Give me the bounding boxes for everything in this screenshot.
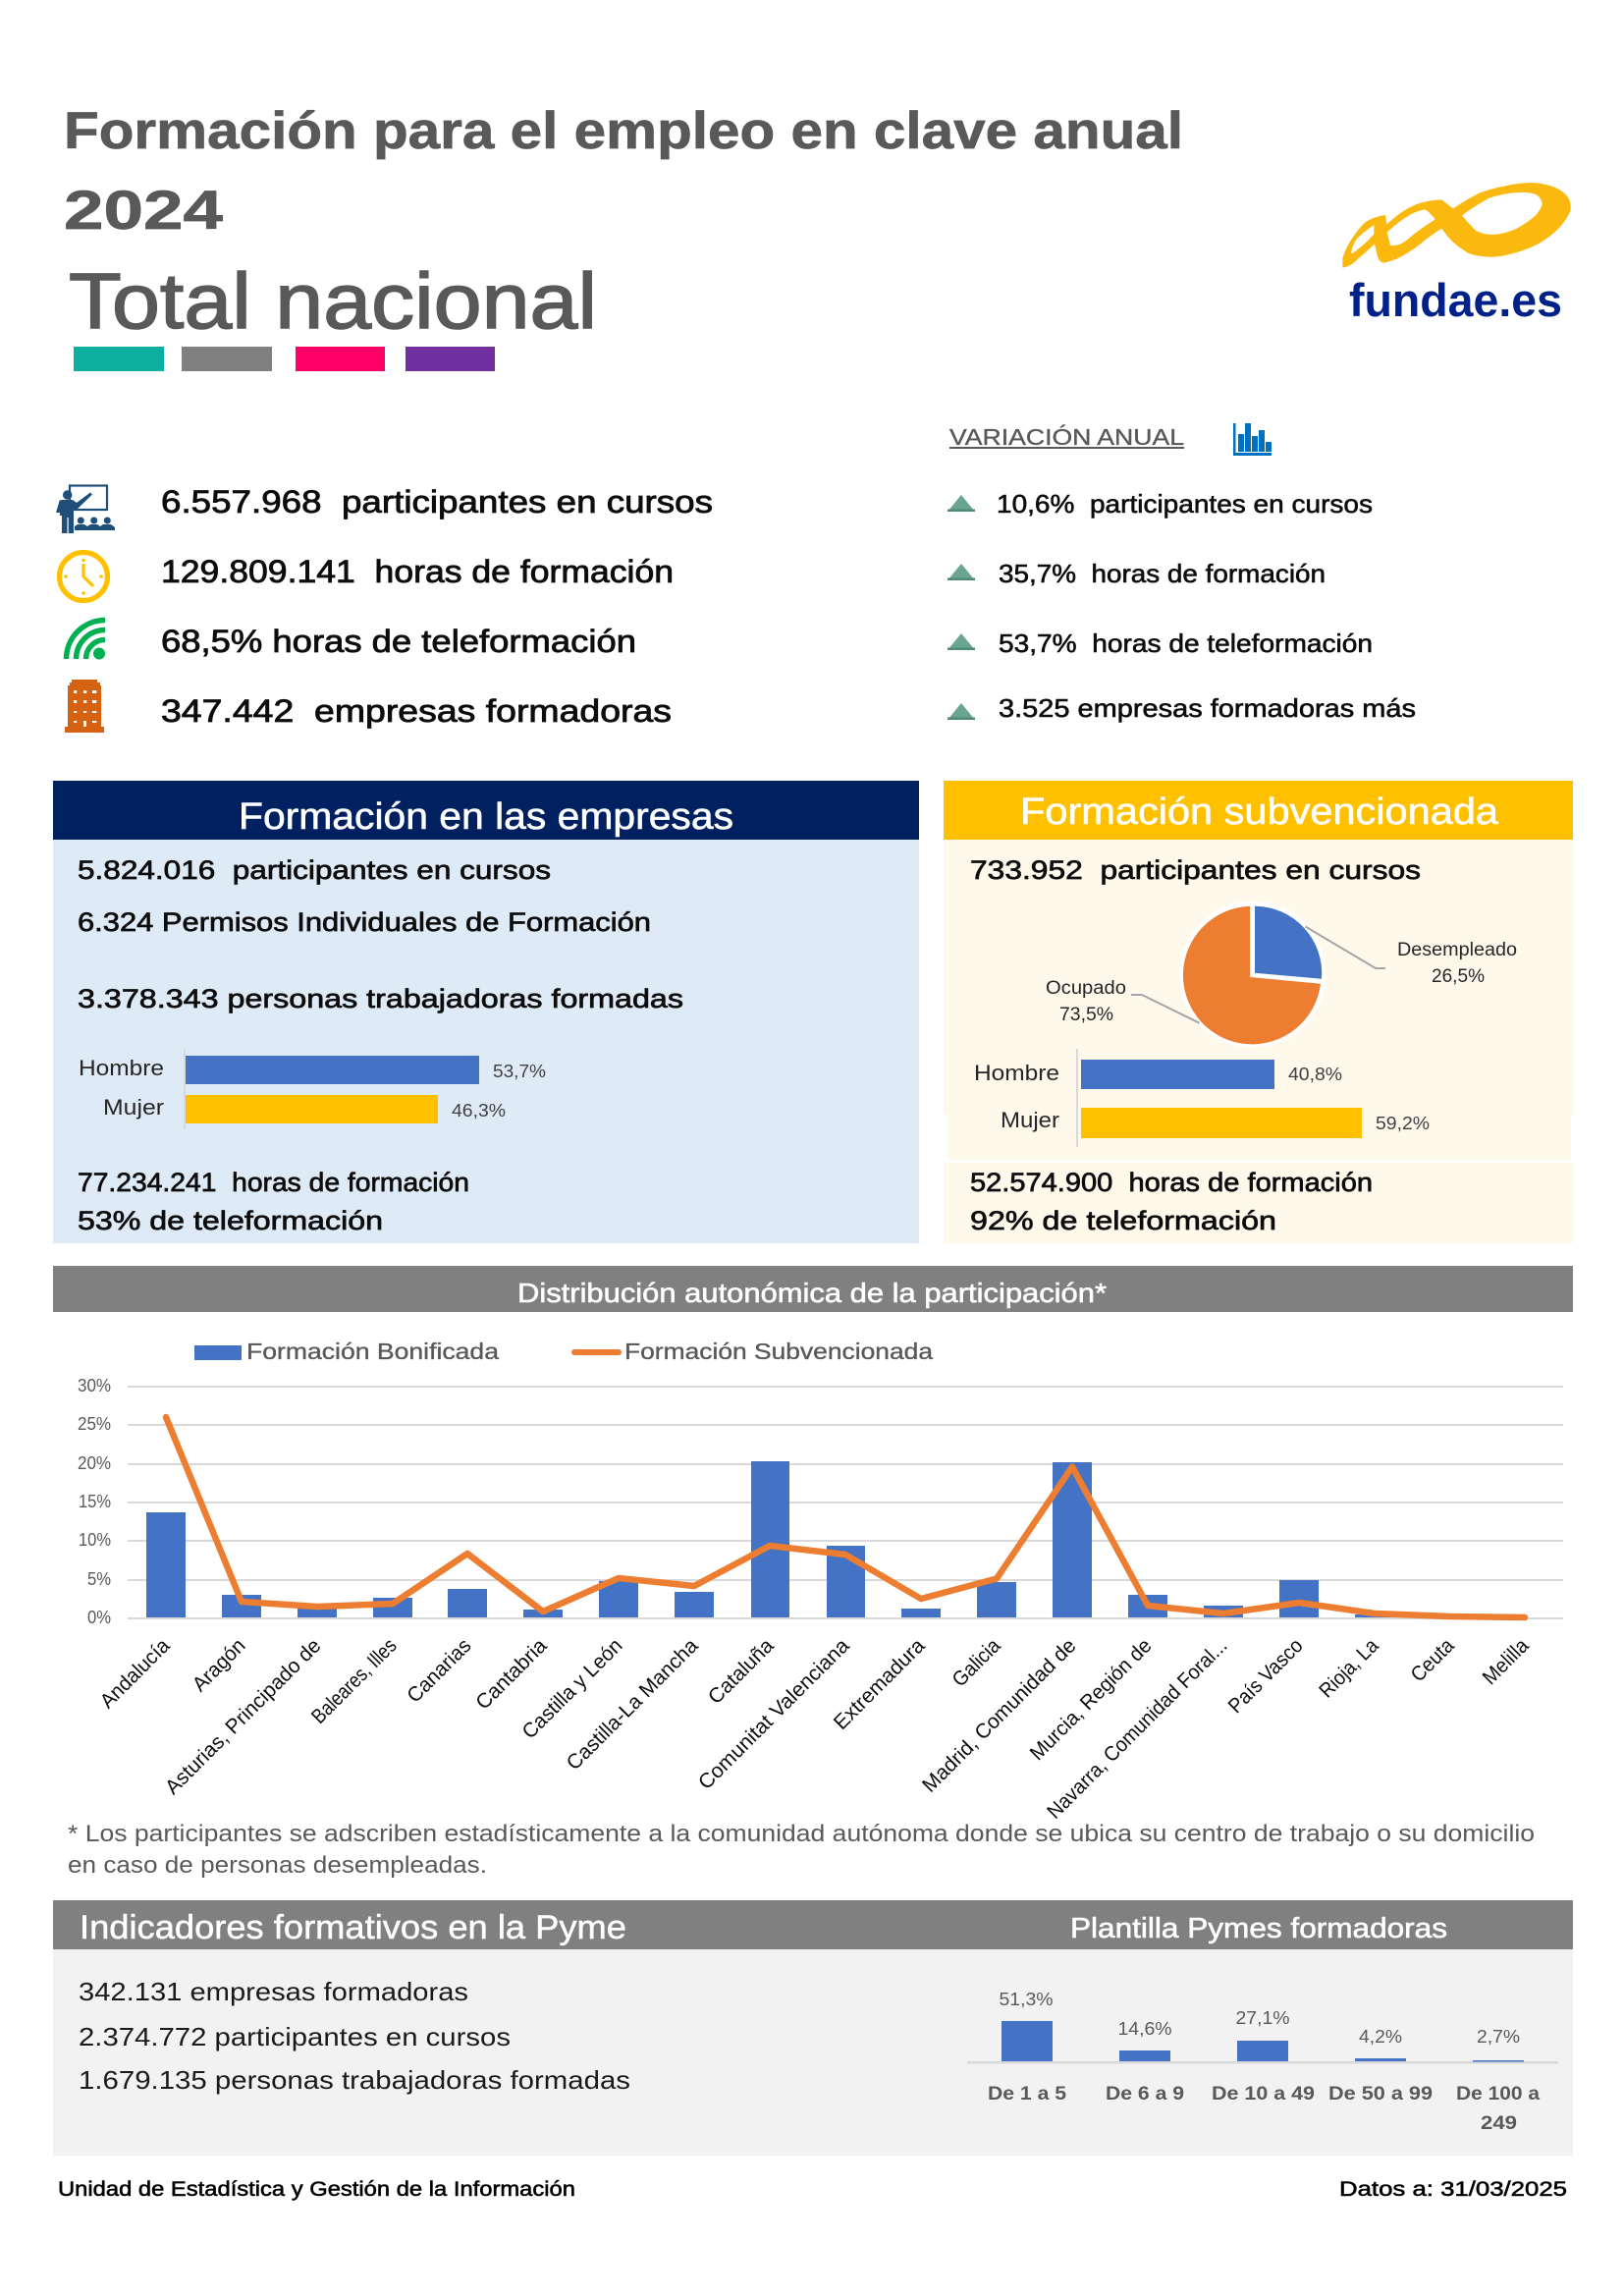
subtitle: Total nacional: [69, 257, 597, 345]
category labels: Murcia, Región de: [1026, 1634, 1157, 1765]
category labels: Aragón: [189, 1634, 250, 1696]
bar chart: plantilla pymes: De 10 a 49: [1212, 2084, 1315, 2105]
y axis labels: 20%: [78, 1453, 111, 1473]
text: horas: 52.574.900 horas de formación: [970, 1168, 1373, 1197]
icon: wifi: [67, 621, 105, 660]
category labels: Galicia: [948, 1634, 1005, 1691]
icon: clock: [59, 552, 108, 601]
text: teleformación: 53% de teleformación: [78, 1206, 383, 1235]
panel: formación subvencionada: [944, 781, 1573, 1243]
title block: [64, 102, 1183, 345]
text: permisos: 6.324 Permisos Individuales de Formación: [78, 907, 651, 937]
logo: fundae.es: [1342, 183, 1571, 326]
category labels: [96, 1634, 1534, 1824]
panel heading: Formación en las empresas: [239, 796, 733, 838]
icon: building: [65, 680, 104, 733]
bar chart: sexo subvencionada: Mujer: [1001, 1108, 1059, 1132]
stat: empresas: 347.442 empresas formadoras: [161, 693, 672, 729]
text: participantes: 733.952 participantes en cursos: [970, 855, 1421, 885]
panel heading: [53, 781, 919, 840]
y axis labels: [78, 1376, 111, 1627]
bar chart: plantilla pymes: De 100 a: [1456, 2084, 1540, 2105]
bar chart: plantilla pymes: [967, 1990, 1558, 2134]
category labels: Rioja, La: [1315, 1634, 1383, 1703]
y axis labels: 25%: [78, 1414, 111, 1434]
legend: Formación Subvencionada: [624, 1339, 933, 1364]
bar chart: plantilla pymes: 27,1%: [1235, 2008, 1290, 2028]
title line 1: Formación para el empleo en clave anual: [64, 102, 1183, 160]
panel: formación en las empresas: [53, 781, 919, 1243]
bar chart: sexo subvencionada: 40,8%: [1288, 1065, 1342, 1084]
panel heading: Formación subvencionada: [1020, 792, 1499, 833]
footer: [58, 2178, 1567, 2201]
stat: participantes: 6.557.968 participantes en cursos: [161, 484, 713, 519]
pie chart: 73,5%: [1059, 1005, 1113, 1025]
triangle up 4: [947, 703, 975, 720]
annual variation list: [947, 489, 1416, 723]
category labels: Canarias: [403, 1634, 476, 1708]
line: formación subvencionada: [166, 1417, 1525, 1617]
category labels: Comunitat Valenciana: [694, 1634, 854, 1794]
pie chart: 26,5%: [1432, 966, 1485, 987]
title year: 2024: [64, 179, 223, 241]
key figures: [56, 484, 713, 733]
pie chart: Desempleado: [1397, 940, 1517, 960]
text: teleformación: 92% de teleformación: [970, 1206, 1276, 1235]
bar chart: sexo empresas: Hombre: [79, 1056, 164, 1080]
text: indicadores: 1.679.135 personas trabajadoras formadas: [79, 2065, 630, 2095]
bar chart: plantilla pymes: De 50 a 99: [1328, 2084, 1433, 2105]
y axis labels: 0%: [87, 1608, 111, 1627]
bar chart: sexo empresas: 46,3%: [452, 1101, 506, 1121]
y axis labels: 15%: [79, 1492, 111, 1511]
text: personas: 3.378.343 personas trabajadoras formadas: [78, 984, 683, 1013]
icon: bar chart: [1233, 423, 1272, 456]
bar chart: plantilla pymes: 2,7%: [1477, 2027, 1520, 2047]
triangle up 2: [947, 564, 975, 580]
logo wordmark: fundae.es: [1349, 274, 1562, 326]
legend: [194, 1339, 933, 1364]
category labels: Asturias, Principado de: [161, 1634, 326, 1799]
variación anual heading: VARIACIÓN ANUAL: [949, 424, 1184, 450]
text: indicadores: [79, 1977, 630, 2095]
variation 4: 3.525 empresas formadoras más: [999, 693, 1416, 723]
panel heading: [944, 781, 1573, 840]
triangle up 3: [947, 633, 975, 650]
panel header: [53, 1900, 1573, 1949]
bar chart: sexo empresas: 53,7%: [493, 1062, 546, 1081]
y axis labels: 30%: [78, 1376, 111, 1395]
bar chart: sexo subvencionada: 59,2%: [1376, 1114, 1430, 1133]
bar chart: sexo subvencionada: [974, 1049, 1430, 1147]
bar chart: sexo empresas: Mujer: [103, 1095, 164, 1120]
y axis labels: 5%: [87, 1569, 111, 1589]
footer: Unidad de Estadística y Gestión de la Información: [58, 2178, 575, 2201]
bar chart: plantilla pymes: De 6 a 9: [1106, 2084, 1184, 2105]
panel heading: distribución autonómica: Distribución autonómica de la participación*: [517, 1278, 1107, 1308]
stat: horas: 129.809.141 horas de formación: [161, 554, 674, 589]
footnote: en caso de personas desempleadas.: [68, 1852, 487, 1879]
bar chart: plantilla pymes: 51,3%: [1000, 1990, 1053, 2009]
variation 1: 10,6% participantes en cursos: [997, 489, 1373, 519]
bar chart: plantilla pymes: De 1 a 5: [988, 2084, 1066, 2105]
category labels: Andalucía: [96, 1634, 175, 1713]
pie chart: [1046, 902, 1517, 1047]
panel header: Indicadores formativos en la Pyme: [80, 1909, 626, 1946]
text: indicadores: 2.374.772 participantes en cursos: [79, 2022, 511, 2051]
variation 2: 35,7% horas de formación: [999, 559, 1326, 588]
category labels: Castilla y León: [518, 1634, 627, 1743]
category labels: Ceuta: [1407, 1634, 1459, 1686]
category labels: Melilla: [1479, 1634, 1534, 1689]
text: horas: 77.234.241 horas de formación: [78, 1168, 469, 1197]
category labels: Madrid, Comunidad de: [918, 1634, 1081, 1797]
footnote: [68, 1821, 1535, 1879]
y axis labels: 10%: [79, 1530, 111, 1550]
bar chart: sexo empresas: [79, 1049, 546, 1129]
category labels: Cataluña: [704, 1634, 779, 1709]
chart: distribución autonómica: [78, 1339, 1563, 1824]
bar chart: plantilla pymes: 249: [1481, 2113, 1517, 2134]
gridlines: [128, 1386, 1563, 1619]
footnote: * Los participantes se adscriben estadísticamente a la comunidad autónoma donde se ubica su centro de trabajo o su domicilio: [68, 1821, 1535, 1847]
category labels: Castilla-La Mancha: [563, 1634, 703, 1775]
text: participantes: 5.824.016 participantes en cursos: [78, 855, 551, 885]
triangle up 1: [947, 495, 975, 512]
panel: indicadores pyme: [53, 1900, 1573, 2156]
legend: Formación Bonificada: [246, 1339, 499, 1364]
stat: teleformación: 68,5% horas de teleformación: [161, 624, 636, 659]
bar chart: plantilla pymes: 14,6%: [1117, 2019, 1172, 2039]
text: indicadores: 342.131 empresas formadoras: [79, 1977, 468, 2006]
category labels: Navarra, Comunidad Foral...: [1043, 1634, 1232, 1824]
footer: Datos a: 31/03/2025: [1339, 2178, 1567, 2201]
icon: teacher: [56, 485, 115, 533]
pie chart: Ocupado: [1046, 978, 1126, 999]
bars: formación bonificada: [146, 1461, 1394, 1617]
variation 3: 53,7% horas de teleformación: [999, 629, 1373, 658]
colour swatches: [74, 347, 495, 371]
category labels: Cantabria: [471, 1634, 552, 1715]
bar chart: plantilla pymes: 4,2%: [1359, 2027, 1402, 2047]
category labels: Baleares, Illes: [307, 1634, 402, 1728]
category labels: Extremadura: [830, 1634, 930, 1734]
logo symbol: [1342, 183, 1571, 268]
panel heading: distribución autonómica: [53, 1266, 1573, 1312]
panel header: Plantilla Pymes formadoras: [1070, 1913, 1447, 1944]
category labels: País Vasco: [1224, 1634, 1308, 1718]
bar chart: sexo subvencionada: Hombre: [974, 1061, 1059, 1085]
